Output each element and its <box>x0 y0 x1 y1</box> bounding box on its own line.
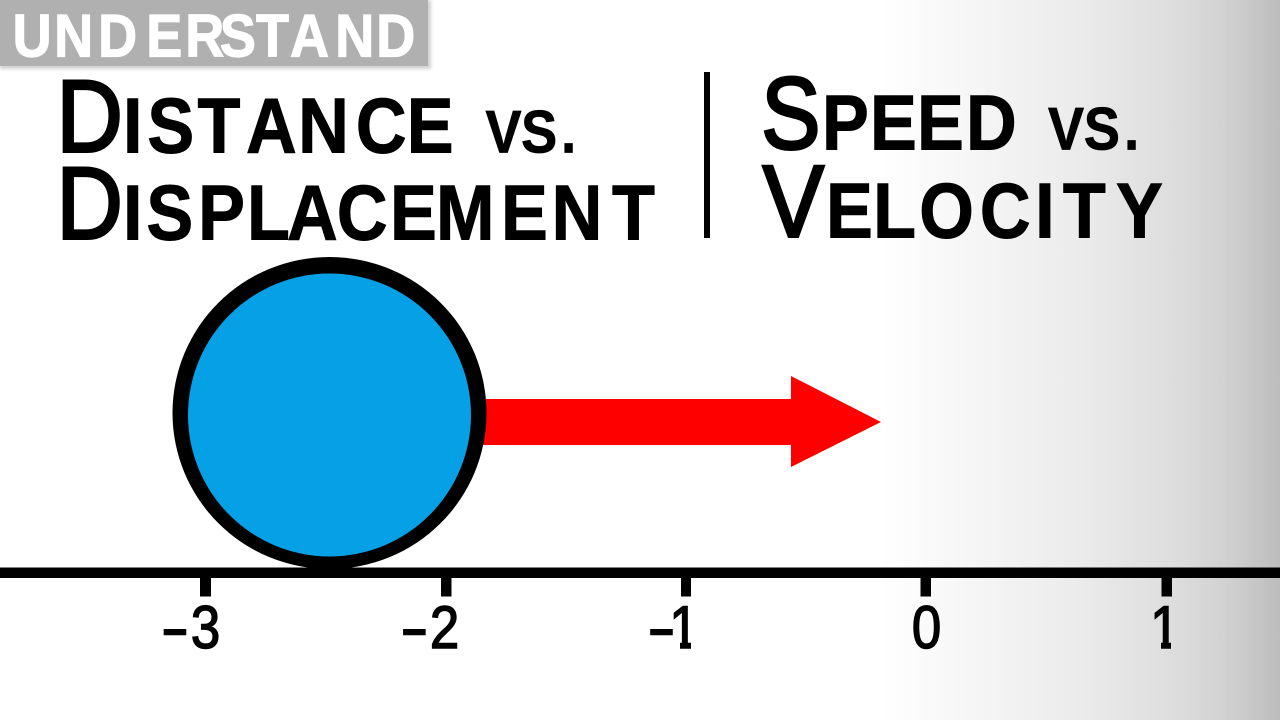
title: distance vs. displacement <box>57 59 655 261</box>
ball <box>172 257 486 569</box>
banner: understand: UNDERSTAND <box>13 3 415 70</box>
label: -3: - <box>161 595 189 661</box>
title: speed vs. velocity: V <box>763 144 824 259</box>
axis labels <box>164 604 1171 650</box>
label: 0: 0 <box>912 594 941 661</box>
label: -1 <box>650 606 691 649</box>
label: -2: 2 <box>430 594 459 661</box>
title: speed vs. velocity: VS. <box>1048 96 1139 163</box>
label: -2 <box>400 594 459 661</box>
number line <box>0 568 1280 661</box>
title: distance vs. displacement: VS. <box>486 99 576 166</box>
label: -3 <box>161 594 220 661</box>
arrow: velocity <box>480 376 881 467</box>
title: speed vs. velocity: S <box>761 57 820 171</box>
title: distance vs. displacement: D <box>57 59 123 174</box>
label: -3: 3 <box>191 594 220 661</box>
title: distance vs. displacement: D <box>57 146 123 261</box>
title: speed vs. velocity: PEED <box>822 79 1017 166</box>
label: -2: - <box>400 595 428 661</box>
title: distance vs. displacement: ISTANCE <box>123 82 454 169</box>
label: 1: 1 <box>1150 594 1180 661</box>
title: speed vs. velocity <box>761 57 1163 259</box>
title: distance vs. displacement: ISPLACEMENT <box>123 169 655 256</box>
divider <box>704 72 710 238</box>
title: speed vs. velocity: ELOCITY <box>826 167 1163 254</box>
label: -1: 1 <box>669 594 699 661</box>
tick marks <box>200 576 1172 596</box>
label: -1: - <box>647 595 675 661</box>
